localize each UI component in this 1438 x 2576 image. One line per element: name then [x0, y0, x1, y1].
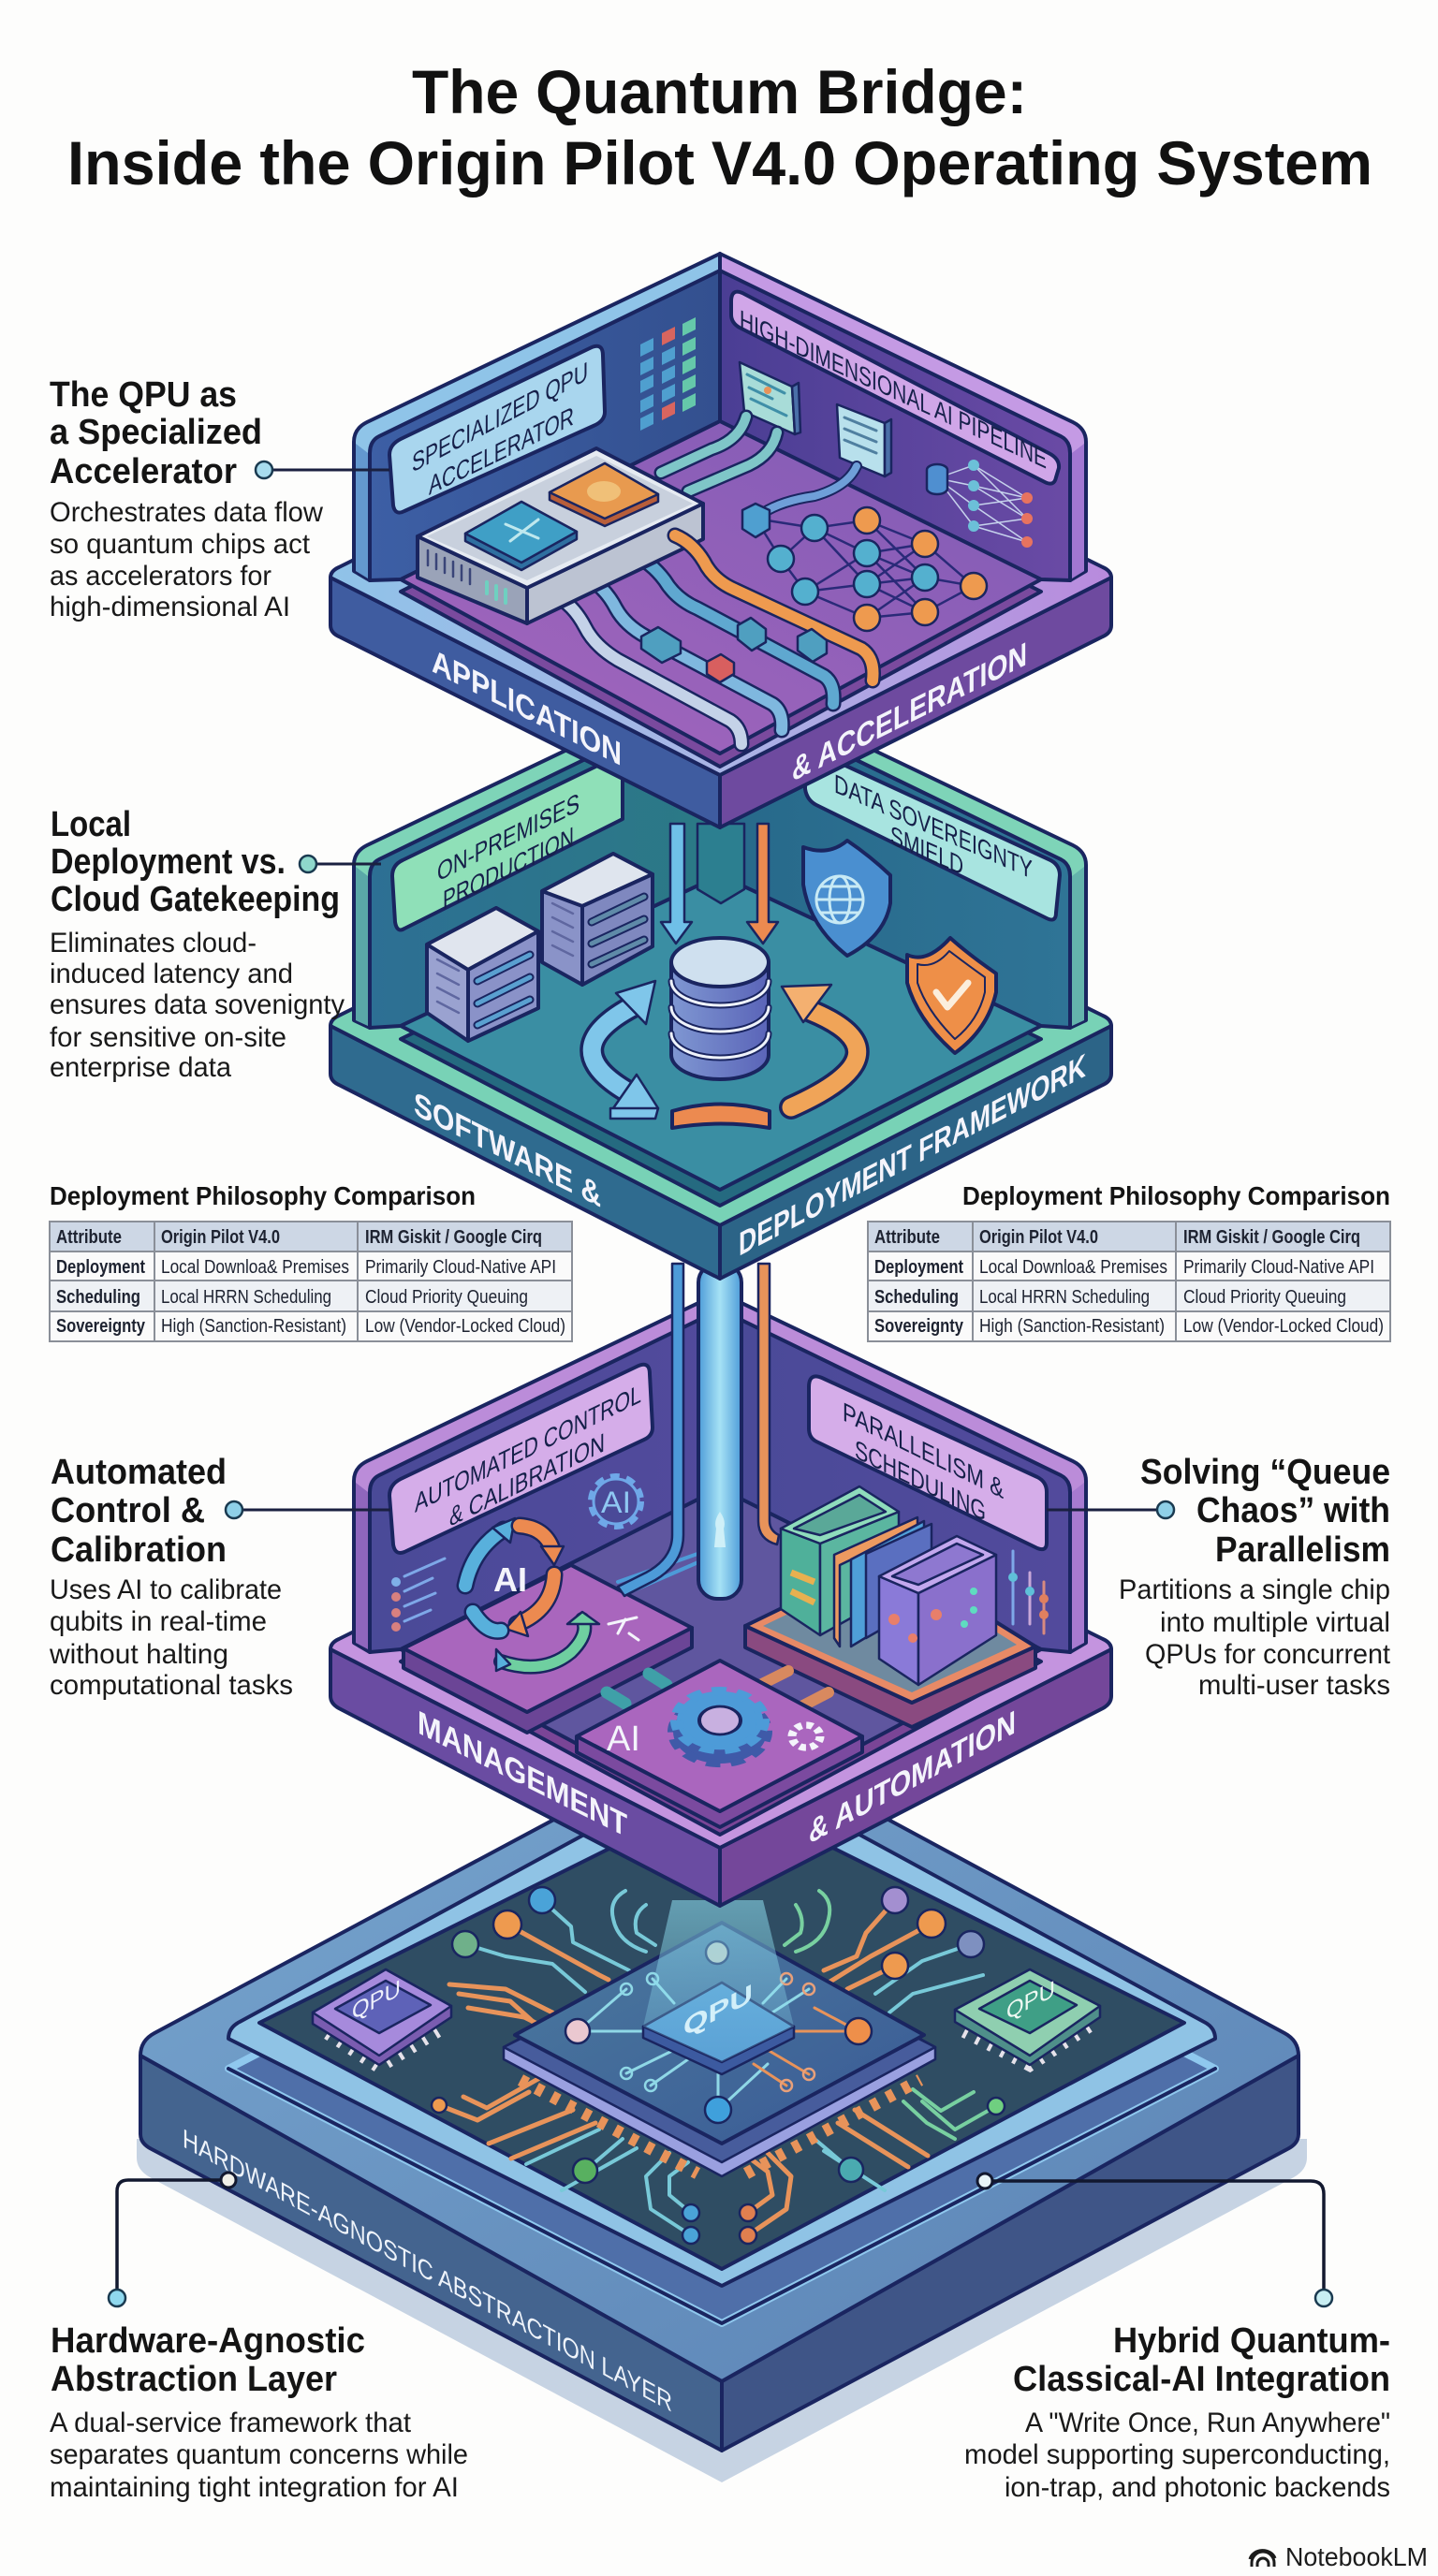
- callout: hardware-agnostic: maintaining tight integration for AI: [50, 2472, 459, 2503]
- callout: local deployment: ensures data sovenignty: [50, 989, 345, 1020]
- base top rim: [330, 378, 1111, 775]
- central pipes through layer 3: [618, 1264, 779, 1599]
- virtual QPU boxes: [781, 1486, 996, 1685]
- table: deployment comparison right: [868, 1181, 1390, 1341]
- title: Inside the Origin Pilot V4.0 Operating System: [67, 128, 1372, 198]
- table text: IRM Giskit / Google Cirq: [365, 1227, 542, 1248]
- QPU tile center: QPU: [683, 1979, 753, 2043]
- table text: Local Downloa& Premises: [979, 1257, 1167, 1278]
- left calibration tile: [404, 1518, 692, 1733]
- callout: automated control: Calibration: [51, 1530, 227, 1570]
- floor: [401, 1488, 1041, 1821]
- center AI gear tile: AI: [607, 1720, 640, 1759]
- floor: [401, 875, 1041, 1190]
- table text: Scheduling: [874, 1287, 959, 1308]
- layer 1 label: application: APPLICATION: [432, 641, 622, 773]
- table text: Attribute: [56, 1227, 122, 1248]
- pipes inlet on floor: [618, 1554, 700, 1593]
- table text: Scheduling: [56, 1287, 140, 1308]
- table text: Cloud Priority Queuing: [365, 1287, 528, 1308]
- base right side: [720, 1649, 1111, 1906]
- layer 4: hardware abstraction base: [137, 1730, 1307, 2482]
- left wall panel: & CALIBRATION: [449, 1427, 605, 1533]
- table text: Local Downloa& Premises: [161, 1257, 349, 1278]
- right QPU chip: QPU: [1006, 1976, 1055, 2026]
- callout: queue chaos: QPUs for concurrent: [1145, 1639, 1391, 1670]
- callout: hardware-agnostic: Hardware-Agnostic: [51, 2321, 365, 2361]
- table text: Low (Vendor-Locked Cloud): [365, 1316, 565, 1337]
- wall rim right: [720, 254, 1086, 580]
- right QPU chip: [955, 1969, 1100, 2065]
- table text: Sovereignty: [874, 1316, 964, 1337]
- green tile arrow: [501, 1619, 584, 1667]
- right wall panel: PARALLELISM &: [843, 1397, 1004, 1505]
- base shadow: [137, 2139, 1307, 2482]
- layer 3 label: automation: & AUTOMATION: [809, 1703, 1016, 1851]
- orange cable: [675, 535, 873, 681]
- wall rim right: [720, 1293, 1086, 1652]
- panel: data sovereignty shield: [805, 747, 1060, 920]
- panel: on-premises production: PRODUCTION: [443, 821, 574, 916]
- callout: hybrid integration: ion-trap, and photonic backends: [1005, 2472, 1390, 2503]
- board traces: [439, 1891, 996, 2235]
- base top rim: [330, 827, 1111, 1225]
- callout: hybrid integration: A "Write Once, Run Anywhere": [1025, 2408, 1390, 2438]
- icon: database stack: [671, 938, 769, 1079]
- icon: orange check shield: [907, 938, 996, 1053]
- panel: data sovereignty shield: DATA SOVEREIGNTY: [834, 768, 1033, 886]
- callout: queue chaos: Solving “Queue: [1140, 1453, 1390, 1492]
- base left side: [330, 578, 720, 827]
- callout: automated control: qubits in real-time: [50, 1606, 267, 1637]
- layer 1: application and acceleration: [330, 254, 1111, 827]
- chip top face: [515, 1923, 924, 2144]
- layer 3 label: management: MANAGEMENT: [418, 1703, 627, 1845]
- layer 1 label: acceleration: & ACCELERATION: [792, 634, 1027, 789]
- floor: [401, 421, 1041, 754]
- wall inner right: [720, 271, 1070, 580]
- callout: queue chaos: Chaos” with: [1196, 1491, 1390, 1530]
- table text: Deployment: [56, 1257, 145, 1278]
- layer 4 label: HARDWARE-AGNOSTIC ABSTRACTION LAYER: [183, 2124, 672, 2419]
- callout: local deployment: Deployment vs.: [51, 842, 286, 882]
- neural network diagram: [742, 504, 987, 631]
- table text: Origin Pilot V4.0: [979, 1227, 1098, 1248]
- wall inner right: [720, 1310, 1070, 1652]
- right wall panel: [809, 1376, 1047, 1549]
- panel: data sovereignty shield: SMIELD: [890, 820, 963, 882]
- icon: rear server rack: [542, 854, 653, 985]
- icon: blue curved arrow: [592, 981, 658, 1119]
- callout: queue chaos: multi-user tasks: [1198, 1670, 1390, 1701]
- small gear icon: [792, 1725, 820, 1748]
- left wall panel: AUTOMATED CONTROL: [415, 1379, 641, 1519]
- icon: blue globe shield: [803, 841, 890, 956]
- right scheduler tile: [745, 1486, 1035, 1727]
- pipes into layer 2: [661, 824, 778, 944]
- wall rim left: [354, 677, 720, 1028]
- panel: high-dimensional AI pipeline: HIGH-DIMENSIONAL AI PIPELINE: [740, 304, 1047, 476]
- icon: orange curved arrow: [782, 985, 858, 1107]
- base left side: [330, 1026, 720, 1279]
- table heading: Deployment Philosophy Comparison: [50, 1181, 476, 1210]
- base right side: [720, 578, 1111, 827]
- server block: [418, 448, 703, 623]
- icon: orange base arc: [672, 1105, 770, 1128]
- wall rim left: [354, 254, 720, 580]
- title: The Quantum Bridge:: [412, 57, 1027, 126]
- left QPU chip: QPU: [352, 1975, 401, 2026]
- AI calibration cycle arrows: [465, 1518, 638, 1671]
- wall rim left: [354, 1293, 720, 1652]
- wall log lines: [391, 1559, 445, 1632]
- callout: local deployment: [50, 805, 381, 1083]
- callout: QPU accelerator: Accelerator: [50, 452, 237, 491]
- tier foot: [228, 1814, 1215, 2323]
- table text: Primarily Cloud-Native API: [1183, 1257, 1374, 1278]
- table text: Origin Pilot V4.0: [161, 1227, 280, 1248]
- callout: queue chaos: Partitions a single chip: [1119, 1574, 1390, 1605]
- back wall mini network: [927, 460, 1033, 548]
- callout: automated control: without halting: [49, 1639, 228, 1670]
- callout: hybrid integration: [964, 2174, 1390, 2503]
- wall data screens: [740, 362, 891, 476]
- callout: QPU accelerator: a Specialized: [50, 413, 262, 452]
- callout: queue chaos: Parallelism: [1215, 1530, 1390, 1570]
- table text: Sovereignty: [56, 1316, 146, 1337]
- table text: [874, 1227, 1384, 1337]
- table grid: [868, 1222, 1390, 1341]
- callout: hardware-agnostic: separates quantum concerns while: [50, 2439, 468, 2470]
- floor ledge: [401, 1498, 1041, 1835]
- panel: specialized QPU accelerator: [389, 346, 605, 513]
- quantum beam: [643, 1900, 794, 2062]
- callout: QPU accelerator: The QPU as: [50, 375, 237, 415]
- callout: queue chaos: [1047, 1453, 1391, 1701]
- center AI gear tile: [577, 1661, 862, 1827]
- panel: on-premises production: ON-PREMISES: [437, 787, 580, 888]
- table text: High (Sanction-Resistant): [979, 1316, 1165, 1337]
- callout: local deployment: for sensitive on-site: [50, 1022, 286, 1053]
- table text: Local HRRN Scheduling: [979, 1287, 1150, 1308]
- base left side: [330, 1649, 720, 1906]
- wall inner right: [720, 694, 1070, 1028]
- table text: High (Sanction-Resistant): [161, 1316, 346, 1337]
- layer 2 label: software: SOFTWARE &: [414, 1084, 601, 1215]
- callout: QPU accelerator: high-dimensional AI: [50, 592, 290, 622]
- callout: hardware-agnostic: Abstraction Layer: [51, 2360, 337, 2399]
- table text: Low (Vendor-Locked Cloud): [1183, 1316, 1384, 1337]
- connectors: [607, 1671, 829, 1705]
- callout: local deployment: Local: [51, 805, 131, 844]
- panel: specialized QPU accelerator: SPECIALIZED QPU: [412, 357, 588, 479]
- callout: local deployment: induced latency and: [50, 959, 293, 989]
- layer 3: management and automation: [330, 1293, 1111, 1906]
- right wall waveforms: [1008, 1551, 1049, 1633]
- layer 2 label: deployment framework: DEPLOYMENT FRAMEWORK: [739, 1046, 1086, 1264]
- title: [67, 57, 1372, 198]
- QPU tile center: [643, 1979, 794, 2074]
- gear icon: [673, 1691, 767, 1764]
- base top rim: [330, 1450, 1111, 1848]
- orange chip: [550, 463, 658, 526]
- table text: Local HRRN Scheduling: [161, 1287, 331, 1308]
- table grid: [50, 1222, 572, 1341]
- floor ledge: [401, 885, 1041, 1206]
- callout: hybrid integration: Classical-AI Integration: [1013, 2360, 1390, 2399]
- callout: automated control: Control &: [51, 1491, 205, 1530]
- chip nodes: [565, 1941, 872, 2123]
- table heading: Deployment Philosophy Comparison: [962, 1181, 1390, 1210]
- board nodes: [432, 1887, 1005, 2244]
- tier light rim: [228, 1760, 1215, 2286]
- table text: Cloud Priority Queuing: [1183, 1287, 1346, 1308]
- wall rim right: [720, 677, 1086, 1028]
- callout: local deployment: Cloud Gatekeeping: [51, 880, 340, 919]
- floor ledge: [401, 431, 1041, 767]
- wall status indicators: [640, 317, 696, 431]
- callout: hardware-agnostic: A dual-service framework that: [50, 2408, 412, 2438]
- callout: QPU accelerator: [50, 375, 389, 622]
- callout: QPU accelerator: so quantum chips act: [50, 529, 311, 560]
- callout: queue chaos: into multiple virtual: [1160, 1607, 1390, 1638]
- callout: QPU accelerator: Orchestrates data flow: [50, 497, 323, 528]
- AI calibration cycle arrows: AI: [493, 1560, 527, 1599]
- panel: high-dimensional AI pipeline: [731, 292, 1059, 484]
- NotebookLM logo: NotebookLM: [1285, 2542, 1428, 2571]
- icon: AI gear on wall: [593, 1478, 639, 1525]
- base right side face: [722, 2056, 1299, 2451]
- inline cable modules: [641, 618, 827, 682]
- callout: QPU accelerator: as accelerators for: [50, 561, 271, 592]
- panel: on-premises production: [392, 754, 623, 929]
- callout: automated control: computational tasks: [50, 1670, 293, 1701]
- callout: automated control: Automated: [51, 1453, 227, 1492]
- callout: local deployment: Eliminates cloud-: [50, 928, 257, 959]
- callout: hybrid integration: model supporting superconducting,: [964, 2439, 1390, 2470]
- table text: IRM Giskit / Google Cirq: [1183, 1227, 1360, 1248]
- table text: Deployment: [874, 1257, 963, 1278]
- callout: local deployment: enterprise data: [50, 1052, 231, 1083]
- base right side: [720, 1026, 1111, 1279]
- chip inner traces: [578, 1979, 809, 2110]
- chip pins: [521, 2080, 697, 2174]
- callout: hybrid integration: Hybrid Quantum-: [1113, 2321, 1390, 2361]
- layer 2: software and deployment framework: [330, 677, 1111, 1279]
- icon: AI gear on wall: AI: [601, 1486, 631, 1519]
- table text: [56, 1227, 565, 1337]
- callout: automated control: Uses AI to calibrate: [50, 1574, 282, 1605]
- blue chip: [465, 502, 577, 570]
- base left side face: [140, 2056, 722, 2451]
- wall inner left: [370, 271, 720, 580]
- right wall panel: SCHEDULING: [855, 1434, 986, 1528]
- callout: automated control: [49, 1453, 390, 1701]
- center chip: [504, 1923, 935, 2176]
- base top surface: [140, 1730, 1299, 2381]
- table: deployment comparison left: [50, 1181, 572, 1341]
- callout: hardware-agnostic: [50, 2173, 468, 2503]
- wall inner left: [370, 1310, 720, 1652]
- left QPU chip: [313, 1969, 451, 2067]
- back wall cables: [661, 417, 857, 513]
- wall inner left: [370, 694, 720, 1028]
- table text: Primarily Cloud-Native API: [365, 1257, 556, 1278]
- left wall panel: [389, 1365, 653, 1553]
- table text: Attribute: [874, 1227, 940, 1248]
- panel: specialized QPU accelerator: ACCELERATOR: [429, 401, 574, 502]
- icon: front server rack: [427, 908, 538, 1041]
- front data cables: [554, 555, 833, 744]
- circuit board: [259, 1793, 1184, 2269]
